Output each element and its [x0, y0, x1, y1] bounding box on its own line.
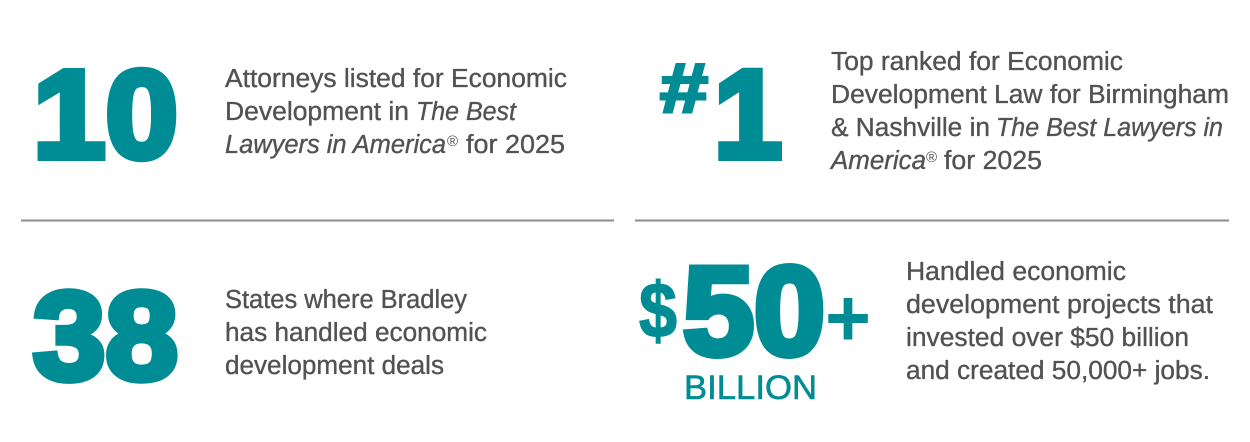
big number: #1: # [660, 49, 708, 127]
description: states: development deals [225, 352, 444, 380]
panel: 10 attorneys [33, 46, 567, 184]
description: attorneys listed: Attorneys listed for Economic [225, 65, 567, 93]
description: top ranked: America [829, 147, 926, 175]
panel: 38 states [33, 267, 487, 406]
description: states: States where Bradley [225, 286, 467, 314]
panel: number 1 ranking [660, 46, 1229, 184]
description: attorneys listed: The Best [416, 98, 517, 126]
description: states: has handled economic [225, 319, 487, 347]
description: top ranked [829, 48, 1229, 175]
description: top ranked: Top ranked for Economic [831, 48, 1123, 76]
description: top ranked: The Best Lawyers in [996, 114, 1223, 142]
description: attorneys listed: ® [447, 133, 458, 150]
description: attorneys listed [225, 65, 567, 159]
description: top ranked: Development Law for Birmingham [831, 81, 1229, 109]
panel: $50+ billion [639, 242, 1213, 407]
description: attorneys listed: for 2025 [466, 131, 565, 159]
description: projects [906, 258, 1213, 385]
big number: #1: 1 [714, 46, 782, 184]
big number: 38: 38 [33, 267, 178, 406]
description: attorneys listed: Lawyers in America [225, 131, 446, 159]
divider right [635, 220, 1229, 222]
description: projects: invested over $50 billion [906, 324, 1189, 352]
description: states [225, 286, 487, 380]
big number: $50+: + [825, 273, 871, 364]
big number: $50+: 50 [683, 242, 825, 382]
big number: $50+: $ [639, 266, 677, 354]
description: top ranked: for 2025 [944, 147, 1042, 175]
description: attorneys listed: Development in [225, 98, 409, 126]
big number: 10: 10 [33, 46, 178, 184]
description: projects: and created 50,000+ jobs. [906, 357, 1210, 385]
big number: #1 [660, 46, 782, 184]
big number: $50+ [639, 242, 871, 382]
description: top ranked: ® [926, 149, 937, 166]
description: projects: development projects that [906, 291, 1213, 319]
description: projects: Handled economic [906, 258, 1126, 286]
label: billion: BILLION [684, 369, 817, 407]
divider left [21, 220, 614, 222]
description: top ranked: & Nashville in [831, 114, 990, 142]
